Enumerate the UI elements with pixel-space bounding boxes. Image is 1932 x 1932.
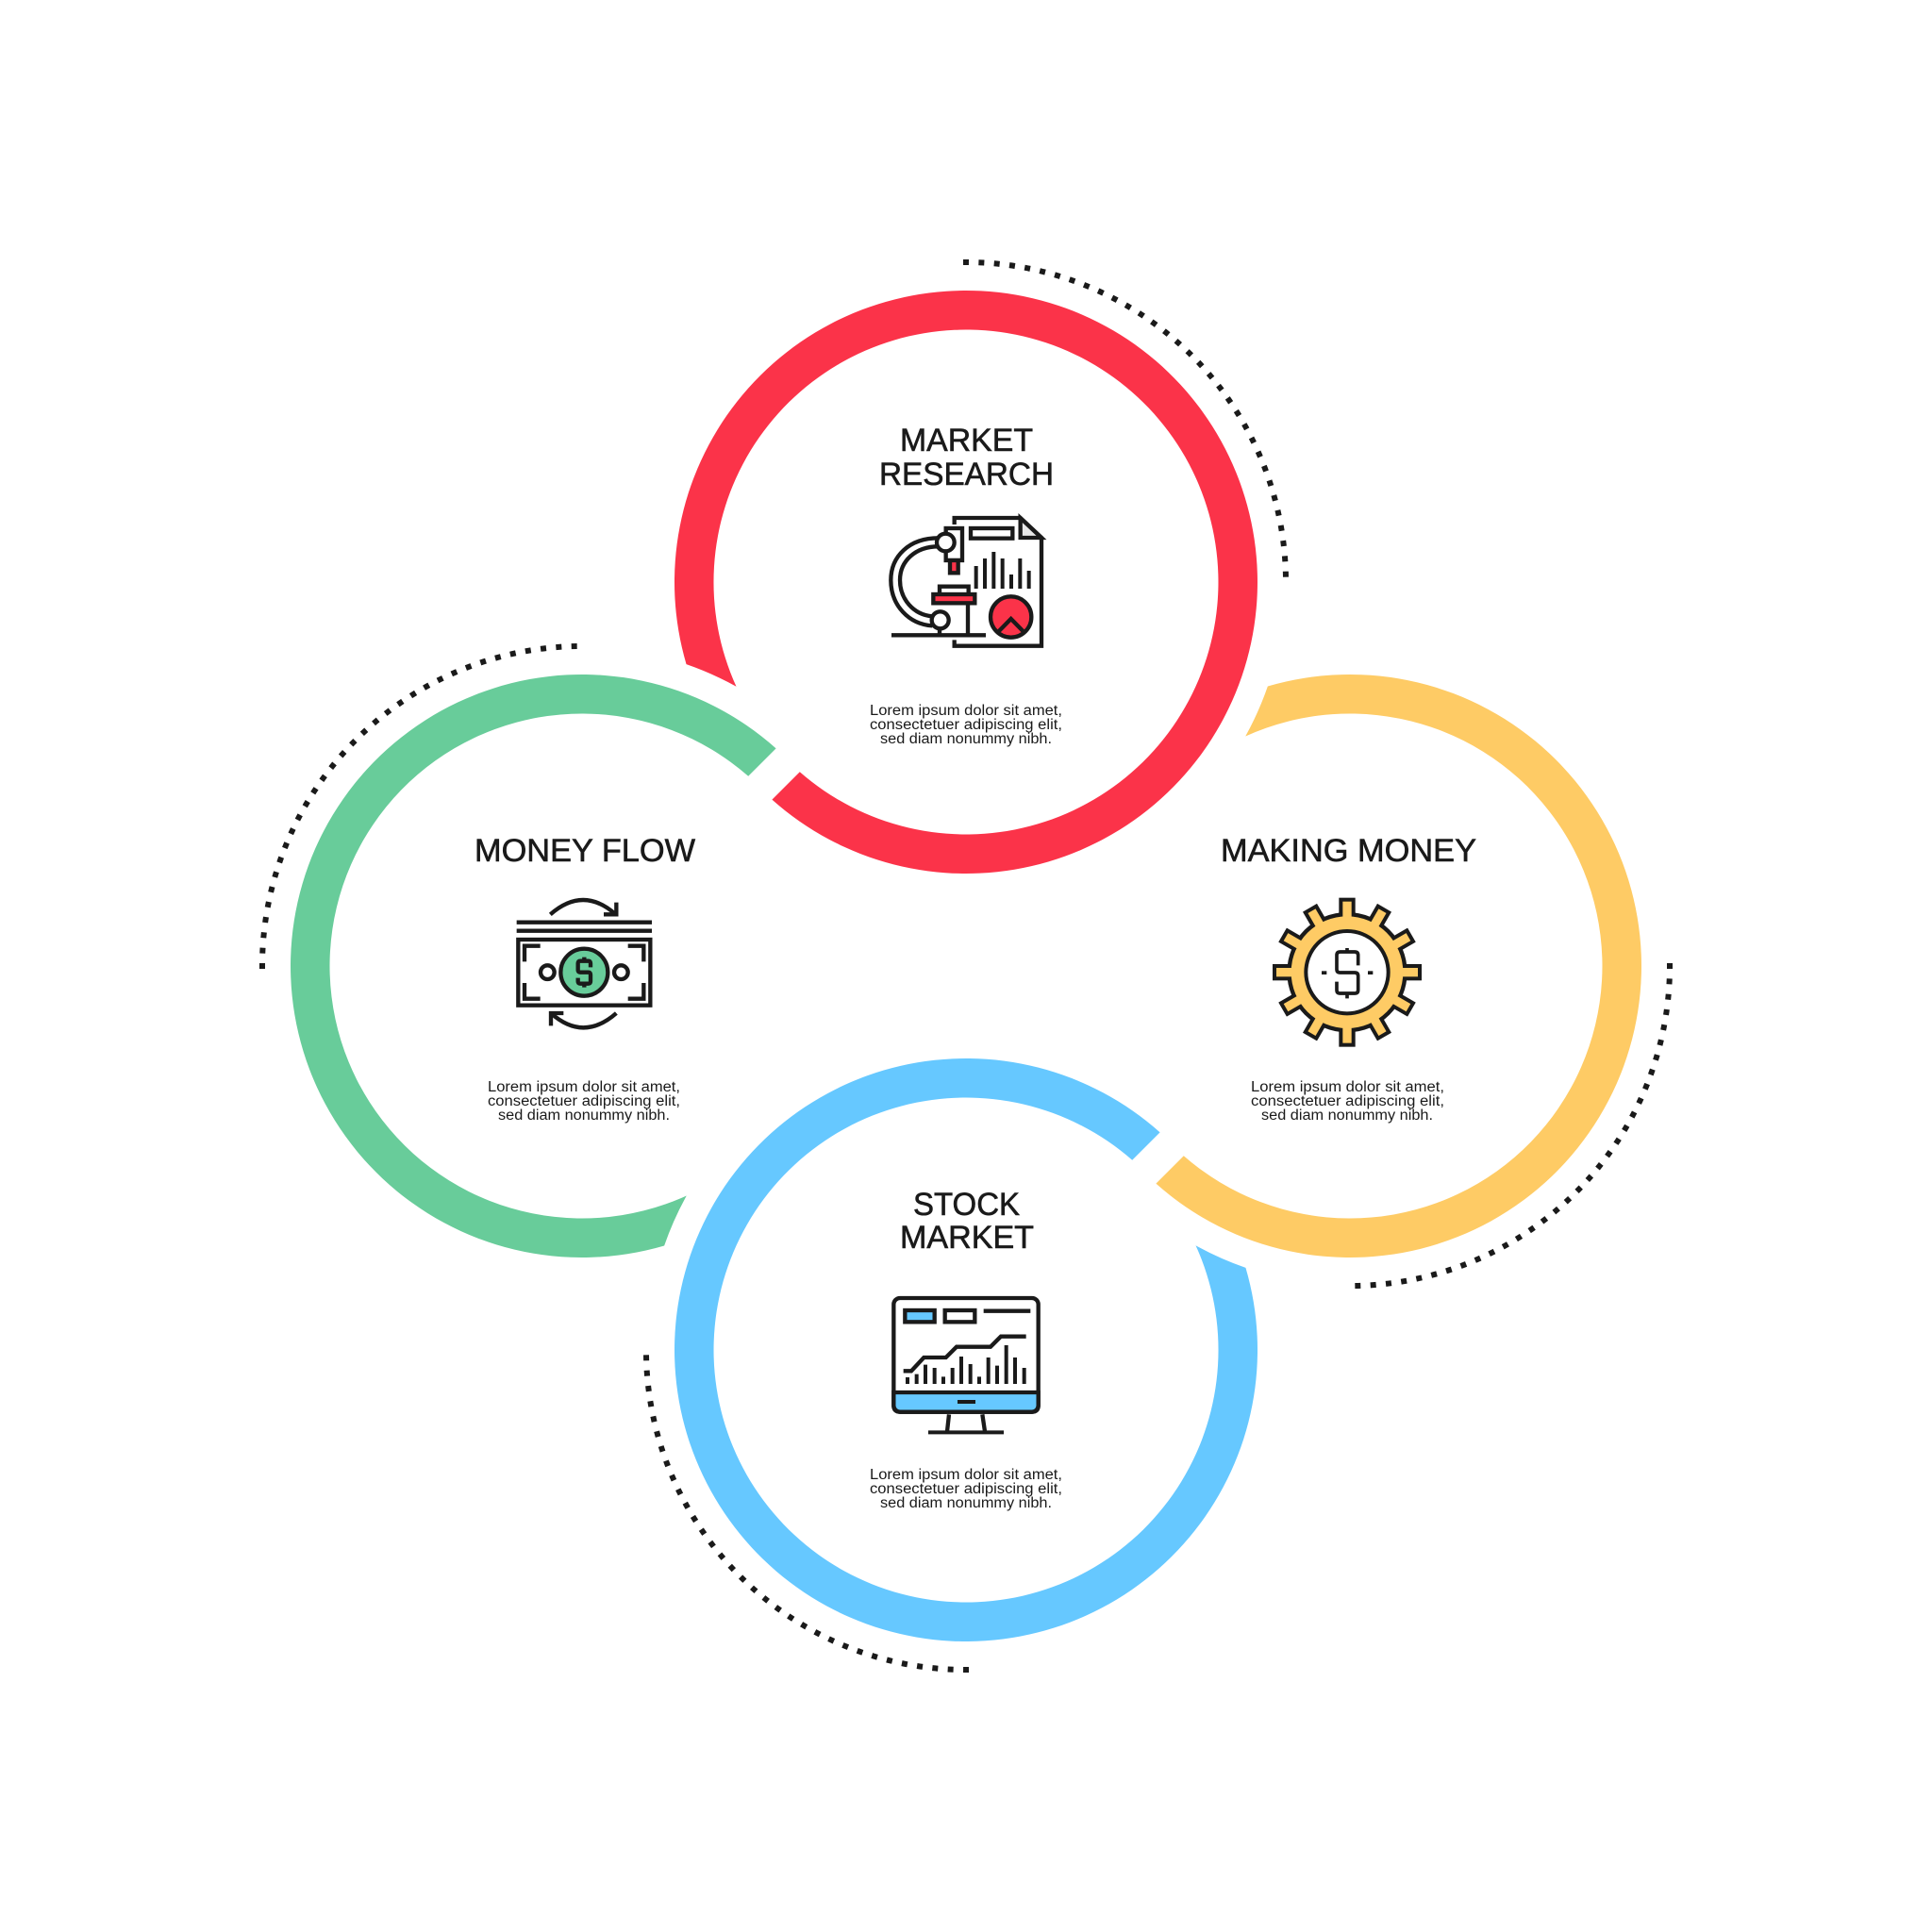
description: making money	[1251, 1079, 1444, 1124]
description: market research	[870, 703, 1062, 747]
description: money flow	[488, 1079, 680, 1124]
heading: market research: RESEARCH	[879, 457, 1054, 492]
description: stock market: Lorem ipsum dolor sit amet,	[870, 1467, 1062, 1483]
blue ring	[675, 1058, 1257, 1641]
dotted arc: green	[262, 646, 577, 969]
heading: money flow: MONEY FLOW	[475, 833, 695, 869]
description: market research: consectetuer adipiscing elit,	[870, 717, 1062, 733]
description: money flow: sed diam nonummy nibh.	[498, 1108, 670, 1124]
red ring	[675, 291, 1257, 874]
heading: market research	[879, 423, 1054, 492]
description: money flow: Lorem ipsum dolor sit amet,	[488, 1079, 680, 1095]
description: making money: sed diam nonummy nibh.	[1261, 1108, 1433, 1124]
panel: market research	[675, 262, 1286, 874]
heading: stock market: MARKET	[900, 1220, 1034, 1256]
description: stock market: sed diam nonummy nibh.	[880, 1495, 1052, 1511]
heading: making money: MAKING MONEY	[1221, 833, 1476, 869]
dotted arc: yellow	[1355, 963, 1670, 1286]
icon: gear with dollar	[1273, 898, 1422, 1047]
heading: market research: MARKET	[900, 423, 1033, 458]
heading: stock market	[900, 1187, 1034, 1256]
yellow ring	[1156, 675, 1641, 1257]
description: money flow: consectetuer adipiscing elit,	[488, 1093, 680, 1109]
icon: monitor with stock chart	[893, 1298, 1039, 1432]
dotted arc: red	[963, 262, 1286, 577]
panel: money flow	[262, 646, 776, 1257]
icon: microscope and report	[891, 518, 1041, 646]
description: stock market	[870, 1467, 1062, 1511]
description: market research: Lorem ipsum dolor sit amet,	[870, 703, 1062, 719]
dotted arc: blue	[646, 1355, 969, 1670]
heading: stock market: STOCK	[913, 1187, 1020, 1223]
description: making money: consectetuer adipiscing elit,	[1251, 1093, 1444, 1109]
panel: stock market	[646, 1058, 1257, 1670]
panel: making money	[1156, 675, 1670, 1286]
description: stock market: consectetuer adipiscing elit,	[870, 1481, 1062, 1497]
icon: banknote with arrows	[517, 900, 652, 1027]
green ring	[291, 675, 776, 1257]
description: making money: Lorem ipsum dolor sit amet,	[1251, 1079, 1444, 1095]
description: market research: sed diam nonummy nibh.	[880, 731, 1052, 747]
